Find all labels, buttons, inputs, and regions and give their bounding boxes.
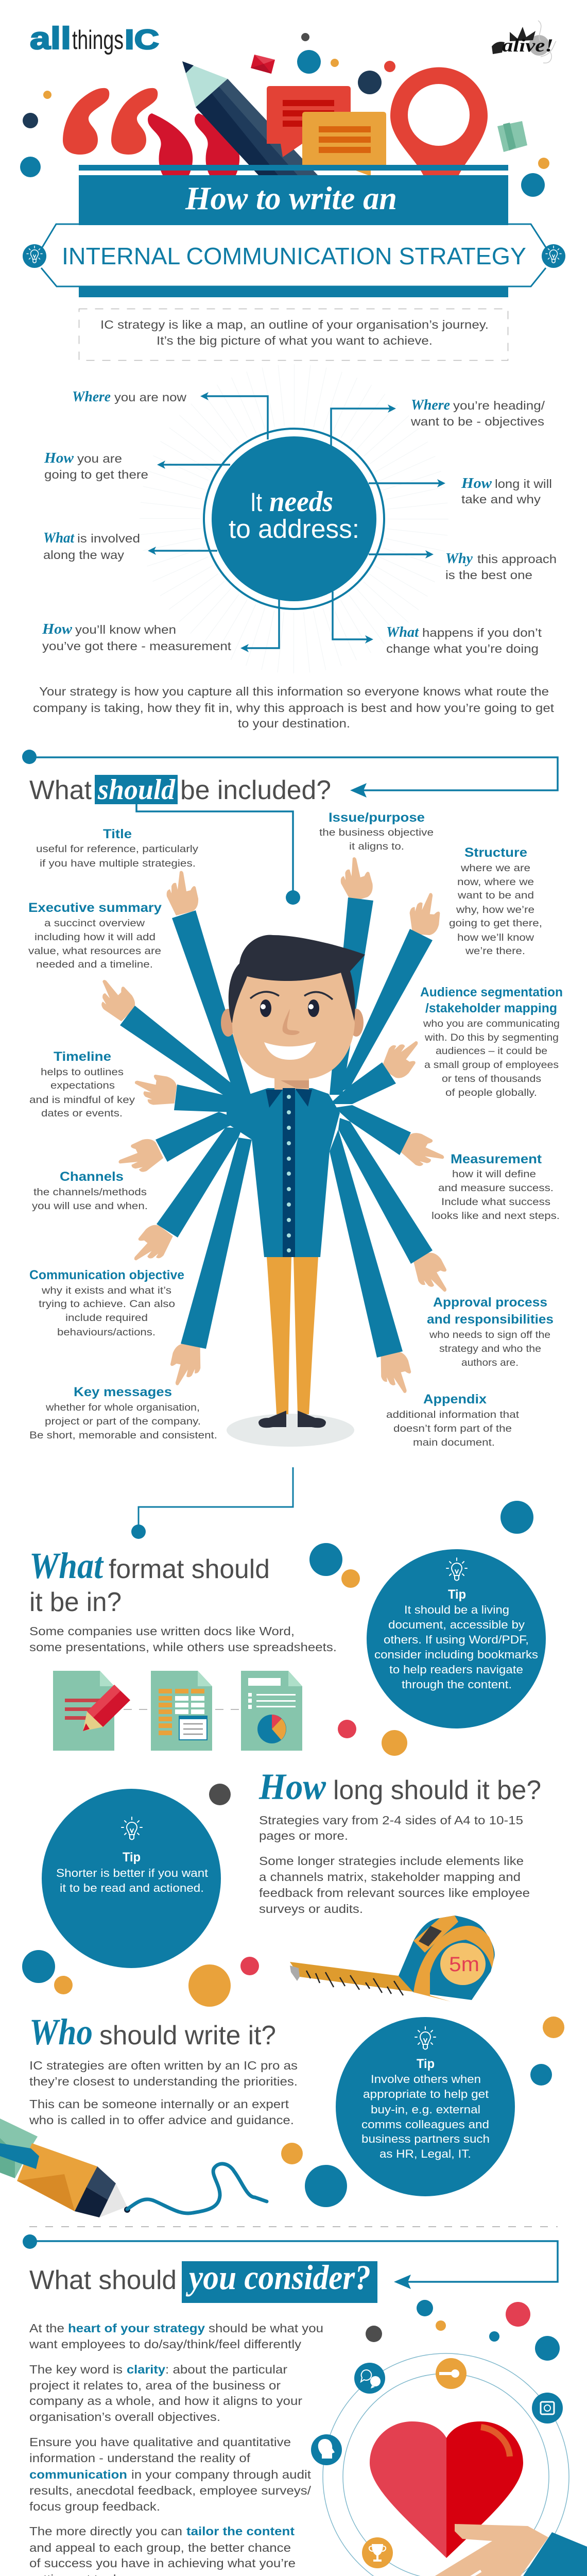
text: how long: [259, 1814, 530, 1916]
centre label: It: [250, 487, 262, 517]
connector to figure: [136, 804, 300, 905]
tip: living document: It should be a living: [404, 1603, 509, 1616]
text: how long: a channels matrix, stakeholder mapping and: [259, 1870, 521, 1884]
label: approval process: strategy and who the: [439, 1343, 541, 1354]
label: key messages: [29, 1385, 217, 1441]
icon: trophy: [362, 2537, 393, 2568]
heading: what should you consider: you consider?: [186, 2258, 371, 2297]
item: how long: take and why: [461, 493, 541, 506]
heading: who should write it: should write it?: [99, 2021, 276, 2050]
arms and shirt: [120, 897, 433, 1358]
label: measurement: looks like and next steps.: [431, 1210, 560, 1222]
text: heart of your strategy: heart of your strategy: [68, 2321, 205, 2335]
item: what involved: is involved: [77, 532, 140, 545]
label: executive summary: [28, 901, 162, 970]
arrow: where you are now: [200, 392, 268, 439]
icon: speaking head: [311, 2434, 342, 2465]
label: structure: [449, 845, 542, 957]
label: channels: the channels/methods: [33, 1187, 147, 1198]
label: channels: [32, 1170, 148, 1212]
icon: pencil: [182, 61, 318, 175]
tip: living document: [367, 1549, 546, 1728]
heading: who should write it: [29, 2011, 276, 2053]
item: where you are now: Where: [72, 388, 111, 405]
text: tailor the content: and appeal to each group, the better chance: [29, 2541, 291, 2554]
icon: red gem: [251, 55, 275, 74]
arrow: how know: [240, 599, 279, 652]
text: who should write it: IC strategies are often written by an IC pro as: [29, 2059, 298, 2072]
label: key messages: Be short, memorable and consistent.: [29, 1430, 217, 1441]
text: clarity: project it relates to, area of the business or: [29, 2379, 281, 2392]
icon: chat: [354, 2363, 385, 2394]
label: approval process: authors are.: [461, 1357, 519, 1368]
label: audience segmentation: with. Do this by segmenting: [424, 1032, 559, 1043]
hands: [91, 856, 459, 1399]
heading: what format: [29, 1545, 270, 1617]
icon: folded map: [497, 121, 527, 152]
icon: tape measure: 5m: [449, 1953, 479, 1976]
text: how long: Some longer strategies include elements like: [259, 1854, 524, 1868]
heading: how long: [209, 1766, 541, 1807]
label: channels: you will use and when.: [32, 1200, 148, 1212]
label: structure: now, where we: [457, 876, 534, 888]
label: title: Title: [103, 827, 132, 841]
text: heart of your strategy: should be what you: [209, 2321, 323, 2335]
label: measurement: how it will define: [452, 1168, 536, 1180]
icon: camera: [532, 2393, 563, 2424]
arrow: how long: [369, 479, 445, 487]
label: structure: where we are: [460, 862, 530, 874]
item: what involved: What: [43, 530, 75, 546]
heading: what should be included: What: [29, 775, 92, 805]
tip: shorter is better: Tip: [123, 1850, 141, 1865]
text: heart of your strategy: [29, 2321, 323, 2351]
tip: living document: others. If using Word/PDF,: [384, 1633, 529, 1646]
text: who should write it: [29, 2059, 298, 2127]
heading: what should you consider: [29, 2258, 377, 2303]
text: communication: communication: [29, 2468, 127, 2481]
label: communication objective: include required: [65, 1312, 148, 1324]
text: heart of your strategy: want employees to do/say/think/feel differently: [29, 2337, 302, 2351]
item: how going: How: [44, 450, 74, 466]
item: how know: [42, 621, 232, 653]
logo: allthingsIC: IC: [125, 24, 159, 55]
tip: involve others: Tip: [417, 2057, 435, 2071]
label: executive summary: Executive summary: [28, 901, 162, 915]
tip: living document: through the content.: [402, 1678, 512, 1691]
label: communication objective: Communication objective: [29, 1268, 184, 1282]
label: appendix: additional information that: [386, 1409, 520, 1420]
icon: left bulb: [23, 244, 46, 268]
icons: three documents: [53, 1671, 302, 1751]
text: who should write it: they’re closest to understanding the priorities.: [29, 2075, 298, 2088]
label: audience segmentation: or tens of thousands: [442, 1073, 541, 1084]
label: channels: Channels: [60, 1170, 124, 1184]
heading: what should you consider: What should: [29, 2265, 177, 2295]
text: communication: [29, 2435, 312, 2513]
label: measurement: and measure success.: [438, 1182, 554, 1194]
logo: allthingsIC: [30, 21, 159, 56]
text: heart of your strategy: At the: [29, 2321, 64, 2335]
heading: how long: long should it be?: [333, 1775, 541, 1805]
intro box: [79, 309, 508, 361]
icon: presentation: [241, 1671, 302, 1751]
tip: shorter is better: Shorter is better if you want: [56, 1867, 208, 1879]
heading: how long: How: [258, 1766, 326, 1807]
label: key messages: whether for whole organisation,: [45, 1402, 200, 1413]
item: how long: [461, 475, 552, 506]
tip: living document: to help readers navigate: [389, 1663, 523, 1676]
decorative dots: consider: [348, 2300, 560, 2576]
label: executive summary: value, what resources are: [28, 945, 161, 957]
arrow: what happens: [333, 591, 373, 643]
icon: written document: [53, 1671, 130, 1751]
label: issue/purpose: it aligns to.: [349, 841, 404, 852]
legs: [267, 1257, 318, 1414]
item: what happens: happens if you don’t: [422, 626, 542, 639]
item: what happens: What: [386, 624, 419, 640]
text: communication: in your company through audit: [131, 2468, 312, 2481]
label: approval process: [427, 1295, 554, 1368]
label: executive summary: a succinct overview: [44, 918, 145, 929]
item: why: Why: [445, 550, 473, 567]
label: timeline: dates or events.: [41, 1108, 123, 1119]
text: who should write it: This can be someone internally or an expert: [29, 2097, 289, 2111]
heading: what format: it be in?: [29, 1587, 122, 1617]
item: where heading: you’re heading/: [453, 399, 545, 412]
label: communication objective: behaviours/actions.: [57, 1327, 156, 1338]
centre label: needs: [269, 486, 333, 518]
text: tailor the content: tailor the content: [186, 2524, 295, 2538]
label: timeline: [29, 1049, 135, 1119]
item: where heading: Where: [411, 397, 450, 413]
arrow: where heading: [331, 404, 396, 446]
heading: what should be included: should: [97, 774, 176, 806]
item: what happens: [386, 624, 542, 655]
character: many-armed man: [91, 856, 459, 1447]
item: how going: going to get there: [44, 468, 148, 481]
label: timeline: and is mindful of key: [29, 1094, 135, 1106]
subtitle: internal communication strategy: INTERNAL COMMUNICATION STRATEGY: [62, 243, 526, 269]
arrow: why: [369, 550, 434, 558]
illustration: heart in hand with orbit icons: [311, 2353, 587, 2576]
tip: involve others: [336, 2017, 515, 2196]
item: why: this approach: [477, 552, 557, 566]
item: where heading: want to be - objectives: [410, 415, 544, 428]
heading: what format: format should: [109, 1554, 270, 1584]
logo: allthingsIC: all: [30, 21, 71, 56]
label: structure: how we’ll know: [457, 932, 534, 943]
title banner: [23, 165, 565, 297]
label: structure: want to be and: [457, 890, 534, 901]
text: communication: information - understand the reality of: [29, 2451, 251, 2465]
centre label: [229, 486, 359, 544]
label: approval process: who needs to sign off the: [429, 1329, 550, 1341]
label: timeline: Timeline: [54, 1049, 111, 1064]
tip: involve others: business partners such: [361, 2132, 490, 2145]
head: [221, 935, 365, 1079]
text: tailor the content: [29, 2524, 296, 2576]
text: format: [29, 1624, 337, 1654]
icon: orange speech bubble: [302, 112, 386, 176]
decorative dots: format: [309, 1501, 533, 1756]
buttons: [287, 1095, 291, 1252]
label: communication objective: trying to achieve. Can also: [39, 1298, 175, 1310]
text: tailor the content: of success you have in achieving what you’re: [29, 2556, 296, 2570]
tip: living document: Tip: [448, 1587, 466, 1602]
item: how long: How: [461, 475, 492, 492]
label: timeline: helps to outlines: [41, 1066, 124, 1078]
text: clarity: [29, 2363, 302, 2424]
label: approval process: Approval process: [433, 1295, 547, 1310]
label: measurement: Measurement: [451, 1152, 542, 1166]
heading: what should be included: be included?: [180, 775, 331, 805]
label: executive summary: needed and a timeline.: [36, 959, 153, 970]
connector arrow: what should be included: [22, 750, 558, 798]
centre label: to address:: [229, 514, 359, 544]
label: title: [36, 827, 198, 869]
label: audience segmentation: of people globally.: [445, 1087, 537, 1098]
connector to format section: [131, 1467, 293, 1539]
tip: involve others: buy-in, e.g. external: [371, 2103, 480, 2116]
label: executive summary: including how it will add: [34, 931, 156, 943]
decorative dots: how long: [22, 1950, 259, 2007]
item: what involved: along the way: [43, 548, 125, 562]
text: how long: surveys or audits.: [259, 1902, 363, 1916]
text: format: Some companies use written docs like Word,: [29, 1624, 295, 1638]
icon: red speech bubble: [267, 86, 351, 157]
text: how long: Strategies vary from 2-4 sides of A4 to 10-15: [259, 1814, 523, 1827]
item: how know: you’ll know when: [75, 623, 176, 636]
text: clarity: organisation’s overall objectives.: [29, 2410, 220, 2424]
tip: involve others: appropriate to help get: [363, 2088, 489, 2100]
tip: living document: document, accessible by: [388, 1618, 525, 1631]
icon: right bulb: [542, 244, 565, 268]
placket: [283, 1088, 295, 1257]
tip: shorter is better: it to be read and actioned.: [60, 1882, 204, 1894]
text: communication: focus group feedback.: [29, 2500, 160, 2513]
text: how long: pages or more.: [259, 1829, 348, 1842]
intro box: It’s the big picture of what you want to achieve.: [157, 334, 433, 347]
radial diagram: it needs to address: [42, 388, 557, 655]
label: audience segmentation: who you are communicating: [423, 1018, 560, 1029]
item: where you are now: [72, 388, 186, 405]
paragraph: your strategy: to your destination.: [238, 717, 350, 730]
icon: key: [436, 2358, 467, 2389]
icon: marker pen with squiggle: [0, 2119, 267, 2217]
item: what happens: change what you’re doing: [386, 642, 539, 655]
paragraph: your strategy: company is taking, how they fit in, why this approach is best and how you’re going to get: [33, 701, 555, 715]
logo: alive: [492, 21, 556, 63]
text: clarity: The key word is: [29, 2363, 123, 2376]
label: structure: we’re there.: [465, 945, 525, 957]
logo: allthingsIC: things: [72, 25, 124, 55]
neck: [274, 1074, 309, 1090]
item: how know: you’ve got there - measurement: [42, 639, 232, 653]
item: how going: [44, 450, 148, 481]
icon: quotation marks: [63, 88, 239, 175]
heading: who should write it: Who: [29, 2011, 93, 2053]
label: structure: Structure: [464, 845, 527, 860]
heart: [370, 2421, 523, 2558]
heading: what format: What: [29, 1545, 104, 1586]
intro box: IC strategy is like a map, an outline of your organisation’s journey.: [100, 318, 489, 331]
label: communication objective: [29, 1268, 184, 1338]
logo: alive: alive!: [502, 35, 554, 56]
label: appendix: doesn’t form part of the: [393, 1423, 512, 1434]
connector arrow: what should you consider: [23, 2234, 558, 2289]
text: communication: results, anecdotal feedback, employee surveys/: [29, 2484, 312, 2497]
item: how know: How: [42, 621, 73, 637]
decorative dots: who: [281, 2016, 564, 2207]
icon: tape measure: [290, 1916, 495, 2002]
item: how long: long it will: [495, 477, 552, 490]
label: title: if you have multiple strategies.: [40, 858, 196, 869]
item: where you are now: you are now: [114, 391, 186, 404]
label: approval process: and responsibilities: [427, 1312, 554, 1327]
label: appendix: Appendix: [423, 1392, 487, 1406]
label: structure: going to get there,: [449, 918, 542, 929]
arrow: how going: [157, 461, 230, 469]
paragraph: your strategy: Your strategy is how you capture all this information so everyone knows what route the: [39, 685, 549, 698]
tip: shorter is better: [42, 1789, 221, 1968]
text: how long: feedback from relevant sources like employee: [259, 1886, 530, 1900]
sleeve: [522, 2532, 587, 2576]
label: audience segmentation: [420, 985, 563, 1098]
label: measurement: Include what success: [441, 1196, 550, 1208]
item: how going: you are: [77, 452, 122, 465]
label: audience segmentation: audiences – it could be: [436, 1045, 547, 1057]
icon: spreadsheet: [151, 1671, 212, 1751]
label: timeline: expectations: [50, 1080, 115, 1091]
text: communication: Ensure you have qualitative and quantitative: [29, 2435, 291, 2449]
label: title: useful for reference, particularly: [36, 843, 198, 855]
text: clarity: : about the particular: [165, 2363, 287, 2376]
label: issue/purpose: the business objective: [319, 827, 434, 838]
label: audience segmentation: a small group of employees: [424, 1059, 559, 1071]
item: where heading: [410, 397, 545, 428]
label: appendix: [386, 1392, 520, 1448]
text: format: some presentations, while others use spreadsheets.: [29, 1640, 337, 1654]
ground shadow: [227, 1414, 354, 1447]
text: clarity: clarity: [127, 2363, 165, 2376]
item: why: is the best one: [445, 568, 532, 582]
label: audience segmentation: Audience segmentation: [420, 985, 563, 999]
label: appendix: main document.: [413, 1437, 495, 1448]
item: what involved: [43, 530, 140, 562]
label: measurement: [431, 1152, 560, 1222]
label: key messages: project or part of the company.: [45, 1416, 201, 1427]
label: issue/purpose: [319, 810, 434, 852]
shoes: [258, 1411, 326, 1428]
text: who should write it: who is called in to offer advice and guidance.: [29, 2113, 294, 2127]
text: clarity: company as a whole, and how it aligns to your: [29, 2394, 302, 2408]
hand: [399, 2524, 548, 2576]
icon: map pin: [390, 67, 488, 175]
collar: [266, 1089, 312, 1108]
label: audience segmentation: /stakeholder mapping: [425, 1001, 557, 1015]
label: structure: why, how we’re: [456, 904, 534, 916]
item: why: [445, 550, 557, 582]
heading: what should be included: [29, 774, 331, 806]
label: issue/purpose: Issue/purpose: [329, 810, 425, 825]
tip: living document: consider including bookmarks: [374, 1648, 538, 1661]
paragraph: your strategy: [33, 685, 555, 730]
tip: involve others: as HR, Legal, IT.: [379, 2147, 471, 2160]
tip: involve others: Involve others when: [371, 2073, 481, 2086]
decorative dots: header: [20, 33, 549, 197]
label: key messages: Key messages: [74, 1385, 172, 1399]
tip: involve others: comms colleagues and: [361, 2118, 489, 2131]
text: tailor the content: The more directly you can: [29, 2524, 182, 2538]
label: communication objective: why it exists and what it’s: [41, 1285, 171, 1296]
title: how to write an: How to write an: [185, 180, 397, 216]
arrow: what involved: [148, 547, 217, 555]
